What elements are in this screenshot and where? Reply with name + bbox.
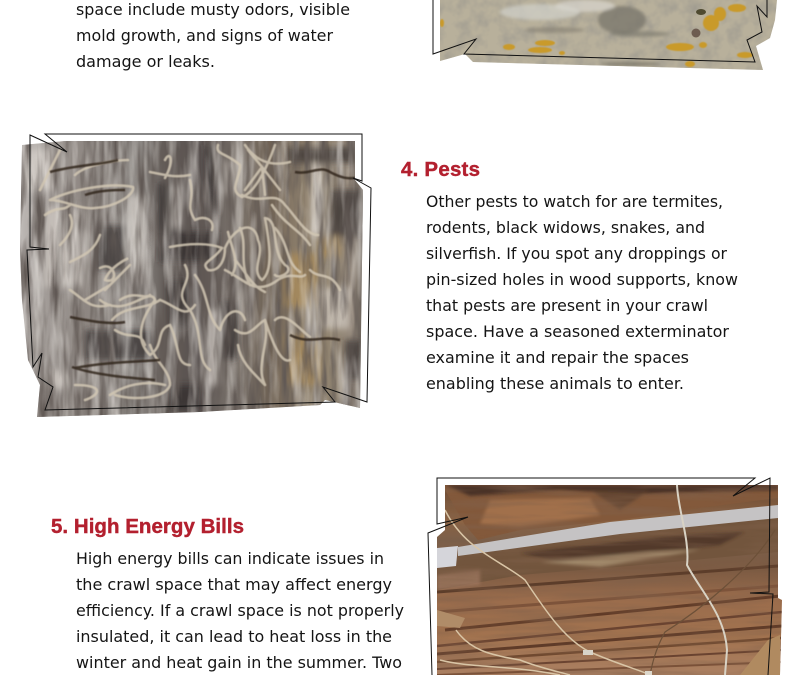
photo: termite damaged wood [15,134,371,420]
photo: crawl space ceiling joists [428,478,785,675]
text block: pests body: examine it and repair the spaces [426,348,689,367]
text block: high energy bills body: High energy bills can indicate issues in [76,549,384,568]
sketch frame: termite photo [27,134,371,410]
text block: section 3 ending [76,0,350,71]
photo: mold on wood [432,0,777,70]
text block: pests body: pin-sized holes in wood supports, know [426,270,738,289]
text block: high energy bills body [76,549,404,672]
white pipe [458,505,778,556]
sketch frame: mold photo [433,0,767,62]
text block: section 3 ending: damage or leaks. [76,52,215,71]
text block: high energy bills body: efficiency. If a crawl space is not properly [76,601,404,620]
text block: high energy bills body: the crawl space that may affect energy [76,575,392,594]
text block: pests body: space. Have a seasoned exterminator [426,322,729,341]
text block: high energy bills body: winter and heat gain in the summer. Two [76,653,402,672]
text block: high energy bills body: insulated, it can lead to heat loss in the [76,627,392,646]
heading: 4. Pests: 4. Pests [401,158,480,181]
text block: pests body: silverfish. If you spot any droppings or [426,244,727,263]
sketch frame: joists photo [428,478,773,675]
text block: pests body: that pests are present in your crawl [426,296,708,315]
heading: 5. High Energy Bills: 5. High Energy Bills [51,515,244,538]
text block: section 3 ending: space include musty odors, visible [76,0,350,19]
joists [437,566,782,675]
text block: pests body: Other pests to watch for are termites, [426,192,723,211]
text block: pests body [426,192,738,393]
text block: pests body: enabling these animals to enter. [426,374,684,393]
wires [440,510,650,675]
text block: section 3 ending: mold growth, and signs of water [76,26,333,45]
second beam [437,518,778,590]
termite galleries [40,145,340,400]
text block: pests body: rodents, black widows, snakes, and [426,218,705,237]
top beam [445,485,778,540]
